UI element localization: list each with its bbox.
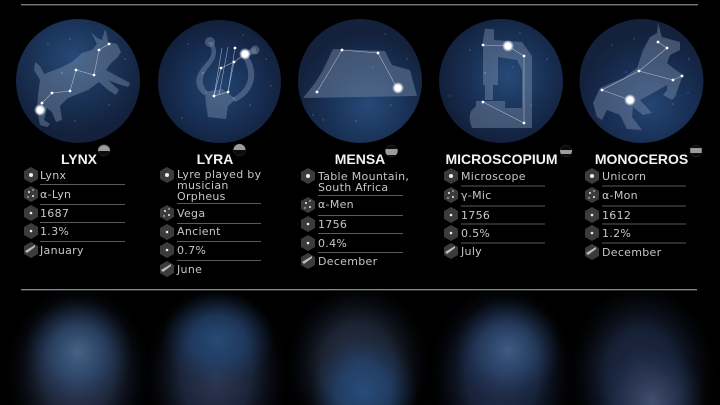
icon: Lynx visibility hemisphere (98, 144, 110, 156)
icon: Lyra visibility hemisphere (234, 144, 246, 156)
facts: Microscopium (444, 168, 545, 259)
star map: Mensa (298, 19, 422, 143)
bottom divider line (21, 289, 697, 290)
star map: Lyra (158, 20, 281, 143)
star map: Monoceros (580, 19, 704, 143)
facts: Mensa: Table Mountain, (317, 170, 409, 183)
facts: Lynx: α-Lyn (40, 188, 71, 201)
facts: Lyra: Vega (177, 207, 205, 220)
facts: Mensa: 0.4% (318, 237, 347, 250)
facts: Monoceros: 1612 (602, 209, 631, 222)
facts: Monoceros: December (602, 246, 662, 259)
facts: Monoceros (585, 168, 686, 260)
facts: Lynx: January (39, 244, 84, 257)
facts: Lyra: June (176, 263, 202, 276)
panel: Lynx (16, 19, 140, 258)
facts: Lyra: musician (177, 179, 229, 192)
facts: Lyra (160, 167, 262, 277)
heading: Mensa: MENSA (335, 151, 385, 167)
panel: Microscopium (439, 19, 572, 259)
top divider line (21, 4, 698, 5)
star map: Microscopium (439, 19, 563, 143)
facts: Lyra: Orpheus (177, 190, 226, 203)
facts: Mensa: December (318, 255, 378, 268)
blurred glow row (0, 292, 720, 405)
facts: Mensa (301, 168, 409, 269)
facts: Microscopium: Microscope (461, 170, 526, 183)
facts: Lynx: 1687 (40, 207, 69, 220)
star map: Lynx (16, 19, 140, 143)
facts: Lyra: Lyre played by (177, 168, 262, 181)
facts: Lynx (24, 167, 125, 258)
heading: Microscopium: MICROSCOPIUM (446, 151, 558, 167)
heading: Monoceros: MONOCEROS (595, 151, 688, 167)
heading: Lyra: LYRA (197, 151, 233, 167)
facts: Microscopium: 1756 (461, 209, 490, 222)
icon: Microscopium visibility hemisphere (560, 145, 572, 157)
facts: Lynx: Lynx (40, 169, 67, 182)
facts: Microscopium: July (460, 245, 482, 258)
facts: Lyra: 0.7% (177, 244, 206, 257)
heading: Lynx: LYNX (61, 151, 98, 167)
facts: Monoceros: Unicorn (602, 170, 646, 183)
facts: Monoceros: 1.2% (602, 227, 631, 240)
panel: Mensa (298, 19, 422, 269)
panel: Monoceros (580, 19, 704, 260)
icon: Monoceros visibility hemisphere (690, 145, 702, 157)
facts: Mensa: α-Men (318, 198, 354, 211)
facts: Monoceros: α-Mon (602, 189, 638, 202)
facts: Lynx: 1.3% (40, 225, 69, 238)
facts: Mensa: South Africa (318, 181, 388, 194)
facts: Microscopium: 0.5% (461, 227, 490, 240)
icon: Mensa visibility hemisphere (385, 145, 398, 157)
facts: Mensa: 1756 (318, 218, 347, 231)
panel: Lyra (158, 20, 281, 277)
facts: Lyra: Ancient (177, 225, 221, 238)
facts: Microscopium: γ-Mic (461, 189, 492, 202)
